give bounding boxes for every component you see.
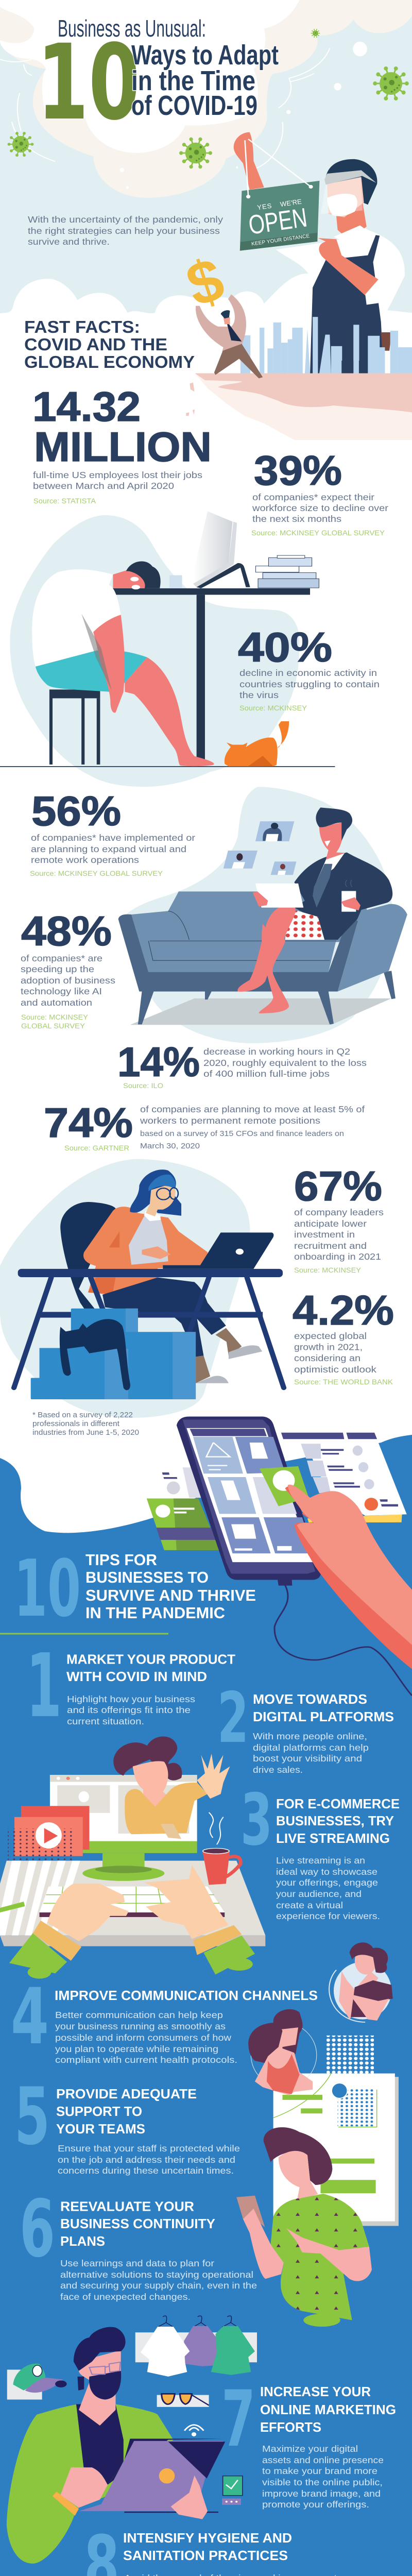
illustration: communication women and board xyxy=(248,1942,399,2226)
left card xyxy=(183,1467,201,1498)
tip 6: PLANS xyxy=(60,2234,105,2249)
tip 8: INTENSIFY HYGIENE AND xyxy=(123,2531,292,2546)
shorts xyxy=(36,650,147,692)
stat: 14%: 14% xyxy=(117,1039,200,1086)
tip 6: alternative solutions to staying operational xyxy=(60,2269,253,2280)
legs xyxy=(259,924,289,1013)
blob xyxy=(0,1159,250,1418)
tip 4: Better communication can help keep xyxy=(55,2010,223,2020)
shirt xyxy=(32,569,121,667)
connector and cable xyxy=(274,1585,412,1696)
mug xyxy=(226,1856,241,1877)
tip 1: and its offerings fit into the xyxy=(67,1705,191,1715)
left arm xyxy=(243,2209,284,2279)
illustration: cliff xyxy=(186,374,412,440)
heading: 10 tips: 10 xyxy=(14,1543,81,1634)
tip 1: MARKET YOUR PRODUCT xyxy=(66,1653,235,1667)
stat: 56%: remote work operations xyxy=(31,855,139,865)
stat: 39%: of companies* expect their xyxy=(252,492,374,502)
heading: 10 tips: TIPS FOR xyxy=(85,1551,157,1569)
cardigan xyxy=(83,1207,208,1295)
stat: 40%: decline in economic activity in xyxy=(239,668,377,678)
stat: 14.32 million: Source: STATISTA xyxy=(33,497,96,505)
desk xyxy=(112,588,310,595)
tip 3: your offerings, engage xyxy=(276,1877,378,1888)
tip 6: Use learnings and data to plan for xyxy=(60,2258,214,2268)
leg xyxy=(125,657,214,766)
tip 2: With more people online, xyxy=(253,1731,367,1741)
streamer woman xyxy=(113,1736,182,1781)
screen xyxy=(186,1428,313,1562)
heading: 10 tips: IN THE PANDEMIC xyxy=(85,1604,225,1622)
neck and head xyxy=(79,2381,115,2426)
tip 5: concerns during these uncertain times. xyxy=(58,2165,234,2176)
tip 2: 2 xyxy=(217,1677,249,1758)
tip 2: MOVE TOWARDS xyxy=(253,1692,367,1707)
title: of COVID-19 xyxy=(131,90,258,121)
tip 5 xyxy=(14,2071,240,2176)
head xyxy=(113,569,147,588)
hands xyxy=(60,2467,108,2507)
sofa front xyxy=(118,914,358,992)
desk legs xyxy=(14,1277,284,1388)
tip 7 xyxy=(221,2375,396,2510)
tip 7: ONLINE MARKETING xyxy=(260,2403,396,2417)
title: Business as Unusual: xyxy=(58,15,206,42)
stat: 74%: workers to permanent remote positions xyxy=(140,1115,320,1126)
stat: 48%: speeding up the xyxy=(21,964,94,974)
stat: 56%: are planning to expand virtual and xyxy=(31,844,186,854)
stat: 14.32 million: between March and April 2020 xyxy=(33,481,174,491)
stat: 48%: GLOBAL SURVEY xyxy=(21,1022,85,1030)
title: 10 xyxy=(37,22,140,143)
board xyxy=(278,2077,399,2226)
stat: 56% xyxy=(30,788,195,877)
tip 4: 4 xyxy=(11,1972,49,2062)
heading: 10 tips: SURVIVE AND THRIVE xyxy=(85,1587,256,1604)
sofa back xyxy=(168,891,368,942)
hand xyxy=(285,1486,412,1669)
illustration: phone shopping app xyxy=(147,1417,412,1696)
phone xyxy=(236,2196,265,2227)
tip 4: you plan to operate while remaining xyxy=(55,2044,218,2054)
tip 3: ideal way to showcase xyxy=(276,1867,377,1877)
tip 7: EFFORTS xyxy=(260,2420,321,2435)
stat: 40%: Source: MCKINSEY xyxy=(239,704,307,712)
bottom clouds of hero xyxy=(0,274,412,368)
title xyxy=(37,15,279,143)
stat: 48% xyxy=(21,908,115,1030)
sign text: WE'RE xyxy=(280,197,303,208)
stat: 56%: of companies* have implemented or xyxy=(31,833,195,843)
stat: 40%: 40% xyxy=(238,624,332,671)
stat: 40% xyxy=(238,624,380,712)
tip 1: Highlight how your business xyxy=(67,1694,195,1704)
tip 6: and securing your supply chain, even in the xyxy=(60,2280,257,2291)
shirts on hangers xyxy=(158,2316,238,2327)
stat: 67% xyxy=(294,1163,384,1274)
tip 1 xyxy=(26,1635,235,1737)
tip 2 xyxy=(217,1677,394,1775)
stat: 48%: adoption of business xyxy=(21,975,115,986)
keyboard xyxy=(40,1887,225,1912)
stat: 14.32 million: full-time US employees lost their jobs xyxy=(33,470,202,480)
tip 5: Ensure that your staff is protected while xyxy=(58,2143,240,2154)
background: top sky xyxy=(0,0,412,367)
pencil xyxy=(0,1902,25,1912)
woman pair xyxy=(251,2023,317,2087)
tip 7: assets and online presence xyxy=(262,2455,384,2465)
tip 3: LIVE STREAMING xyxy=(276,1832,390,1846)
tip 4 xyxy=(11,1972,318,2065)
stat: 67%: onboarding in 2021 xyxy=(294,1251,381,1262)
monitor stand xyxy=(83,1841,197,1853)
heading: fast facts: FAST FACTS: xyxy=(24,317,140,336)
tip 6 xyxy=(20,2183,257,2302)
arm xyxy=(93,615,125,713)
tip 3: create a virtual xyxy=(276,1900,343,1910)
stat: 48%: technology like AI xyxy=(21,986,102,996)
stat: 39%: Source: MCKINSEY GLOBAL SURVEY xyxy=(251,529,385,537)
stat: 39%: 39% xyxy=(254,448,342,494)
stat: 40%: countries struggling to contain xyxy=(239,679,380,689)
illustration: man on sofa xyxy=(118,787,407,1043)
pants xyxy=(102,1277,226,1357)
tip 3: BUSINESSES, TRY xyxy=(276,1814,394,1828)
footnote: professionals in different xyxy=(32,1420,119,1428)
body xyxy=(7,2404,174,2564)
cap xyxy=(13,2364,45,2391)
sign text xyxy=(246,197,310,247)
tip 5: YOUR TEAMS xyxy=(56,2122,145,2137)
right arm xyxy=(286,2228,372,2281)
tip 4: compliant with current health protocols. xyxy=(55,2055,237,2065)
top xyxy=(129,1213,168,1265)
stat: 56%: Source: MCKINSEY GLOBAL SURVEY xyxy=(30,869,163,877)
phone body xyxy=(177,1417,321,1580)
neck xyxy=(336,202,367,240)
tip 2: drive sales. xyxy=(253,1765,303,1775)
circle woman xyxy=(334,1962,391,2020)
stat: 74% xyxy=(44,1100,365,1152)
tip 7: INCREASE YOUR xyxy=(260,2385,371,2399)
stat: 48%: 48% xyxy=(21,908,112,955)
tip 5: SUPPORT TO xyxy=(56,2105,142,2119)
stat: 39%: workforce size to decline over xyxy=(252,503,388,513)
stool xyxy=(49,689,100,765)
stat: 48%: Source: MCKINSEY xyxy=(21,1013,89,1021)
shirt xyxy=(276,224,405,322)
stat: 67%: 67% xyxy=(294,1163,382,1210)
tip 7: Maximize your digital xyxy=(262,2444,358,2454)
tip 4: IMPROVE COMMUNICATION CHANNELS xyxy=(55,1989,318,2003)
check box xyxy=(223,2476,243,2496)
sign xyxy=(240,181,319,251)
blob xyxy=(10,515,300,787)
head xyxy=(319,822,346,860)
tip 6: REEVALUATE YOUR xyxy=(60,2200,194,2214)
stat: 74%: of companies are planning to move at least 5% of xyxy=(140,1104,365,1114)
tip 1: WITH COVID IN MIND xyxy=(66,1670,207,1684)
illustration: hero clouds xyxy=(0,0,412,198)
tip 5: PROVIDE ADEQUATE xyxy=(56,2087,197,2102)
sofa legs xyxy=(138,971,396,1024)
title: in the Time xyxy=(131,65,255,96)
tip 7: to make your brand more xyxy=(262,2466,377,2476)
illustration: tired worker at desk xyxy=(0,511,335,787)
head xyxy=(326,159,377,205)
heading: 10 tips: BUSINESSES TO xyxy=(85,1569,209,1586)
illustration: live streaming desk xyxy=(0,1736,265,1979)
stat: 4.2%: 4.2% xyxy=(293,1287,394,1334)
tip 4: possible and inform consumers of how xyxy=(55,2032,231,2043)
hands xyxy=(47,1884,129,1941)
stat: 14%: Source: ILO xyxy=(123,1081,163,1090)
sign text: KEEP YOUR DISTANCE xyxy=(251,233,310,247)
stat: 14%: 2020, roughly equivalent to the loss xyxy=(203,1058,367,1068)
heading: fast facts: GLOBAL ECONOMY xyxy=(24,352,195,371)
tip 6: BUSINESS CONTINUITY xyxy=(60,2217,215,2231)
shirt xyxy=(271,2194,369,2320)
footnote: * Based on a survey of 2,222 xyxy=(32,1411,133,1419)
dollar sign: $ xyxy=(179,245,232,320)
stat: 67%: Source: MCKINSEY xyxy=(294,1266,362,1274)
floor xyxy=(0,766,335,767)
product panels xyxy=(7,2332,257,2407)
stat: 74%: 74% xyxy=(44,1100,133,1146)
cup xyxy=(341,891,356,912)
shirt and tie xyxy=(317,853,345,881)
stat: 39% xyxy=(251,448,388,537)
stat: 48%: and automation xyxy=(21,997,92,1008)
tablet xyxy=(255,884,303,908)
desk xyxy=(0,1861,265,1936)
tip 7: visible to the online public, xyxy=(262,2477,383,2487)
tip 3: experience for viewers. xyxy=(276,1911,380,1921)
intro text: the right strategies can help your business xyxy=(28,226,220,236)
raised arm xyxy=(234,132,264,190)
stat: 39%: the next six months xyxy=(252,514,341,524)
intro text: With the uncertainty of the pandemic, only xyxy=(28,214,223,225)
icon: virus left xyxy=(8,132,33,157)
icon: orange cat xyxy=(225,721,289,766)
stat: 74%: Source: GARTNER xyxy=(64,1144,129,1152)
green floating card xyxy=(260,1466,308,1506)
laptop xyxy=(163,1232,273,1269)
heading: fast facts xyxy=(24,317,195,371)
stat: 74%: based on a survey of 315 CFOs and finance leaders on xyxy=(140,1130,344,1138)
tip 7: 7 xyxy=(221,2375,255,2464)
sign text: YES xyxy=(256,201,272,211)
jacket xyxy=(294,852,392,940)
stat: 14%: of 400 million full-time jobs xyxy=(203,1069,330,1079)
illustration: man holding dollar sign xyxy=(179,245,263,378)
footnote xyxy=(32,1411,139,1437)
forearm and pointing hand xyxy=(318,238,379,297)
tip 6: 6 xyxy=(20,2183,55,2275)
tip 2: boost your visibility and xyxy=(253,1753,362,1764)
stat: 74%: March 30, 2020 xyxy=(140,1142,200,1150)
tip 4: your business running as smoothly as xyxy=(55,2021,226,2031)
tip 2: DIGITAL PLATFORMS xyxy=(253,1710,394,1724)
laptop xyxy=(108,2438,222,2485)
title: Ways to Adapt xyxy=(131,40,279,71)
tip 3 xyxy=(241,1778,400,1921)
illustration: woman at laptop with cat xyxy=(0,1159,284,1418)
sofa right arm xyxy=(338,904,407,992)
cat xyxy=(60,1319,130,1390)
cuffs and sleeves xyxy=(33,1921,242,1961)
video cards xyxy=(21,1806,89,1850)
intro text: survive and thrive. xyxy=(28,236,110,247)
tip 3: 3 xyxy=(241,1778,272,1861)
green shirt woman head xyxy=(264,2127,332,2185)
tip 1: 1 xyxy=(26,1635,62,1737)
heading: 10 tips xyxy=(14,1543,256,1634)
collar xyxy=(334,225,367,252)
icon: virus small xyxy=(311,29,320,38)
illustration: online shop owner xyxy=(7,2316,257,2564)
stat: 4.2%: Source: THE WORLD BANK xyxy=(294,1378,393,1386)
stat: 14%: decrease in working hours in Q2 xyxy=(203,1046,350,1057)
cup xyxy=(169,575,182,588)
ankles and slippers xyxy=(196,1328,242,1383)
illustration: barista with open sign xyxy=(234,132,405,374)
tip 1: current situation. xyxy=(67,1716,144,1726)
stat: 4.2% xyxy=(293,1287,394,1386)
tip 2: digital platforms can help xyxy=(253,1742,369,1753)
chair xyxy=(60,1202,115,1312)
panel: blue tips background xyxy=(0,1435,412,2576)
illustration: woman in green shirt with phone xyxy=(236,2194,372,2327)
tip 8: SANITATION PRACTICES xyxy=(123,2549,288,2563)
stat: 14.32 million: MILLION xyxy=(34,424,212,470)
tip 3: your audience, and xyxy=(276,1889,362,1899)
tip 5: 5 xyxy=(14,2071,50,2163)
tip 5: on the job and address their needs and xyxy=(58,2155,235,2165)
boxes xyxy=(31,1309,196,1399)
stat: 4.2%: optimistic outlook xyxy=(294,1364,376,1375)
stat: 67%: anticipate lower xyxy=(294,1218,367,1229)
icon: virus top right xyxy=(373,66,409,100)
books xyxy=(255,555,319,588)
stat: 4.2%: expected global xyxy=(294,1331,367,1341)
tip 8 xyxy=(84,2519,381,2576)
stat: 14% xyxy=(117,1039,367,1090)
stat: 67%: of company leaders xyxy=(294,1207,384,1217)
sofa seat xyxy=(131,911,336,972)
monitor xyxy=(50,1775,197,1842)
heading: fast facts: COVID AND THE xyxy=(24,335,167,354)
stat: 4.2%: considering an xyxy=(294,1353,360,1363)
hair and head xyxy=(130,1170,181,1216)
tip 6: face of unexpected changes. xyxy=(60,2292,191,2302)
floor shadow xyxy=(130,998,391,1025)
stat: 40%: the virus xyxy=(239,690,279,700)
laptop xyxy=(193,511,233,585)
stat: 48%: of companies* are xyxy=(21,953,102,963)
icon: virus center xyxy=(179,138,212,168)
wifi xyxy=(184,2425,203,2431)
blob xyxy=(126,787,392,1043)
intro text xyxy=(28,214,223,247)
sunglasses xyxy=(162,2394,192,2404)
tip 7: improve brand image, and xyxy=(262,2488,381,2499)
apron xyxy=(310,235,384,374)
stat: 14.32 million: 14.32 xyxy=(32,384,141,430)
strings xyxy=(245,139,311,197)
stat: 67%: recruitment and xyxy=(294,1241,367,1251)
right document xyxy=(307,1514,402,1522)
stat: 14.32 million xyxy=(32,384,212,505)
desk top xyxy=(18,1269,283,1277)
tip 3: FOR E-COMMERCE xyxy=(276,1797,400,1811)
boxers xyxy=(285,910,324,940)
tip 3: Live streaming is an xyxy=(276,1855,365,1866)
illustration: skyline xyxy=(241,317,412,375)
white dot grid xyxy=(327,2036,374,2074)
stat: 67%: investment in xyxy=(294,1229,355,1240)
sign text: OPEN xyxy=(247,202,309,241)
footnote: industries from June 1-5, 2020 xyxy=(32,1429,139,1437)
stat: 56%: 56% xyxy=(31,788,121,835)
video call tiles xyxy=(224,821,297,875)
stat: 4.2%: growth in 2021, xyxy=(294,1342,363,1352)
tip 7: promote your offerings. xyxy=(262,2499,369,2510)
